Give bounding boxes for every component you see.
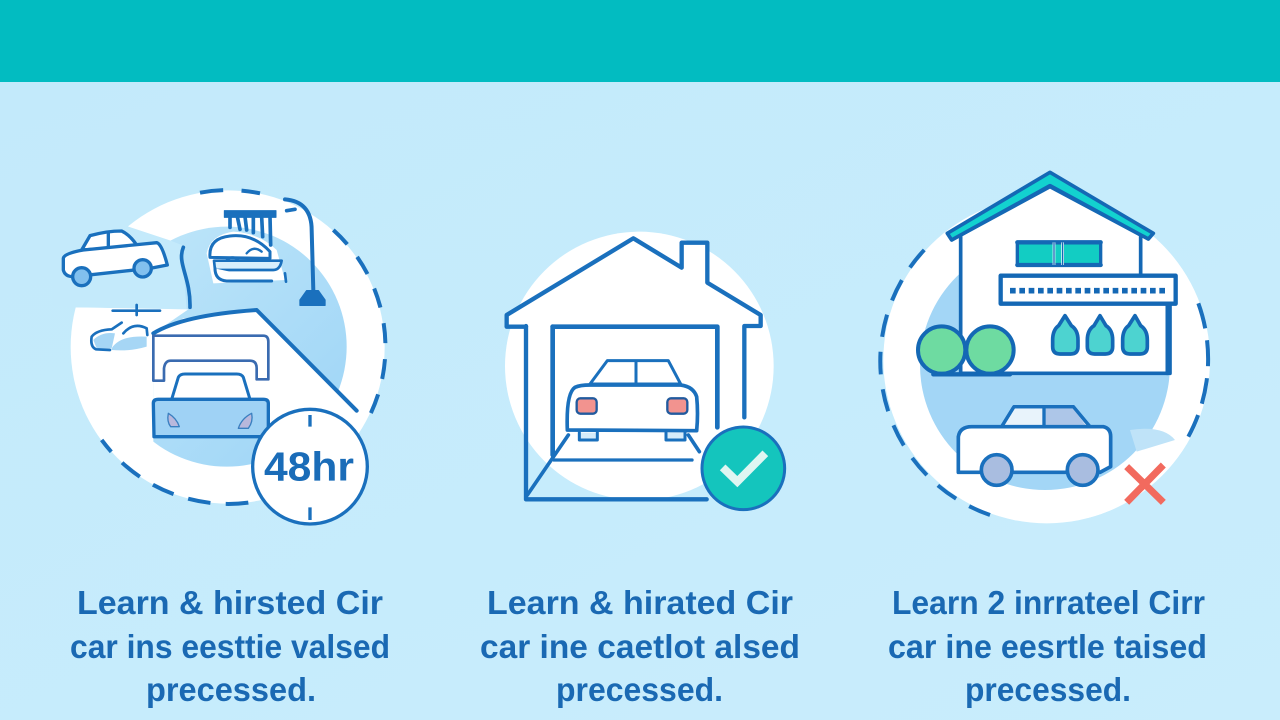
header band [0, 0, 1280, 82]
white patch behind car wash [207, 232, 285, 283]
text block: column 2 caption: car ine caetlot alsed [480, 628, 800, 665]
icon: parking canopy [153, 336, 268, 381]
panel: garage illustration [505, 232, 785, 510]
icon: house with garage [507, 238, 761, 499]
dashed ring [880, 241, 1208, 515]
icon: house [947, 172, 1176, 373]
text block: column 3 caption: Learn 2 inrrateel Cirr [892, 584, 1205, 621]
icon: bushes [918, 326, 1014, 374]
text block: column 1 caption [70, 584, 390, 708]
icon: car wash [210, 211, 286, 282]
icon: front-view car [153, 374, 268, 437]
clock badge: 48hr [253, 409, 367, 524]
text block: column 2 caption [480, 584, 800, 708]
text block: column 1 caption: precessed. [146, 671, 316, 708]
icon: parked car [958, 407, 1111, 485]
icon: small helicopter car [91, 305, 160, 350]
dashed ring [102, 190, 385, 504]
panel: house and car illustration [880, 172, 1210, 532]
road outline [153, 310, 357, 411]
text block: column 1 caption: Learn & hirsted Cir [77, 584, 383, 621]
text block: column 2 caption: Learn & hirated Cir [487, 584, 793, 621]
text block: column 3 caption: car ine eesrtle taised [888, 628, 1207, 665]
panel: 48 hour illustration [53, 190, 385, 524]
text block: column 1 caption: car ins eesttie valsed [70, 628, 390, 665]
text block: column 2 caption: precessed. [556, 671, 723, 708]
text block: column 3 caption: precessed. [965, 671, 1131, 708]
winding road line [182, 247, 190, 307]
clock badge: 48hr: 48hr [264, 443, 354, 489]
icon: red cross [1127, 465, 1163, 502]
shadow blob [1130, 429, 1175, 452]
icon: garage car [567, 361, 697, 440]
icon: check badge [702, 427, 785, 510]
icon: street lamp [285, 199, 325, 305]
text block: column 3 caption [888, 584, 1207, 708]
icon: side-view car [63, 231, 167, 286]
